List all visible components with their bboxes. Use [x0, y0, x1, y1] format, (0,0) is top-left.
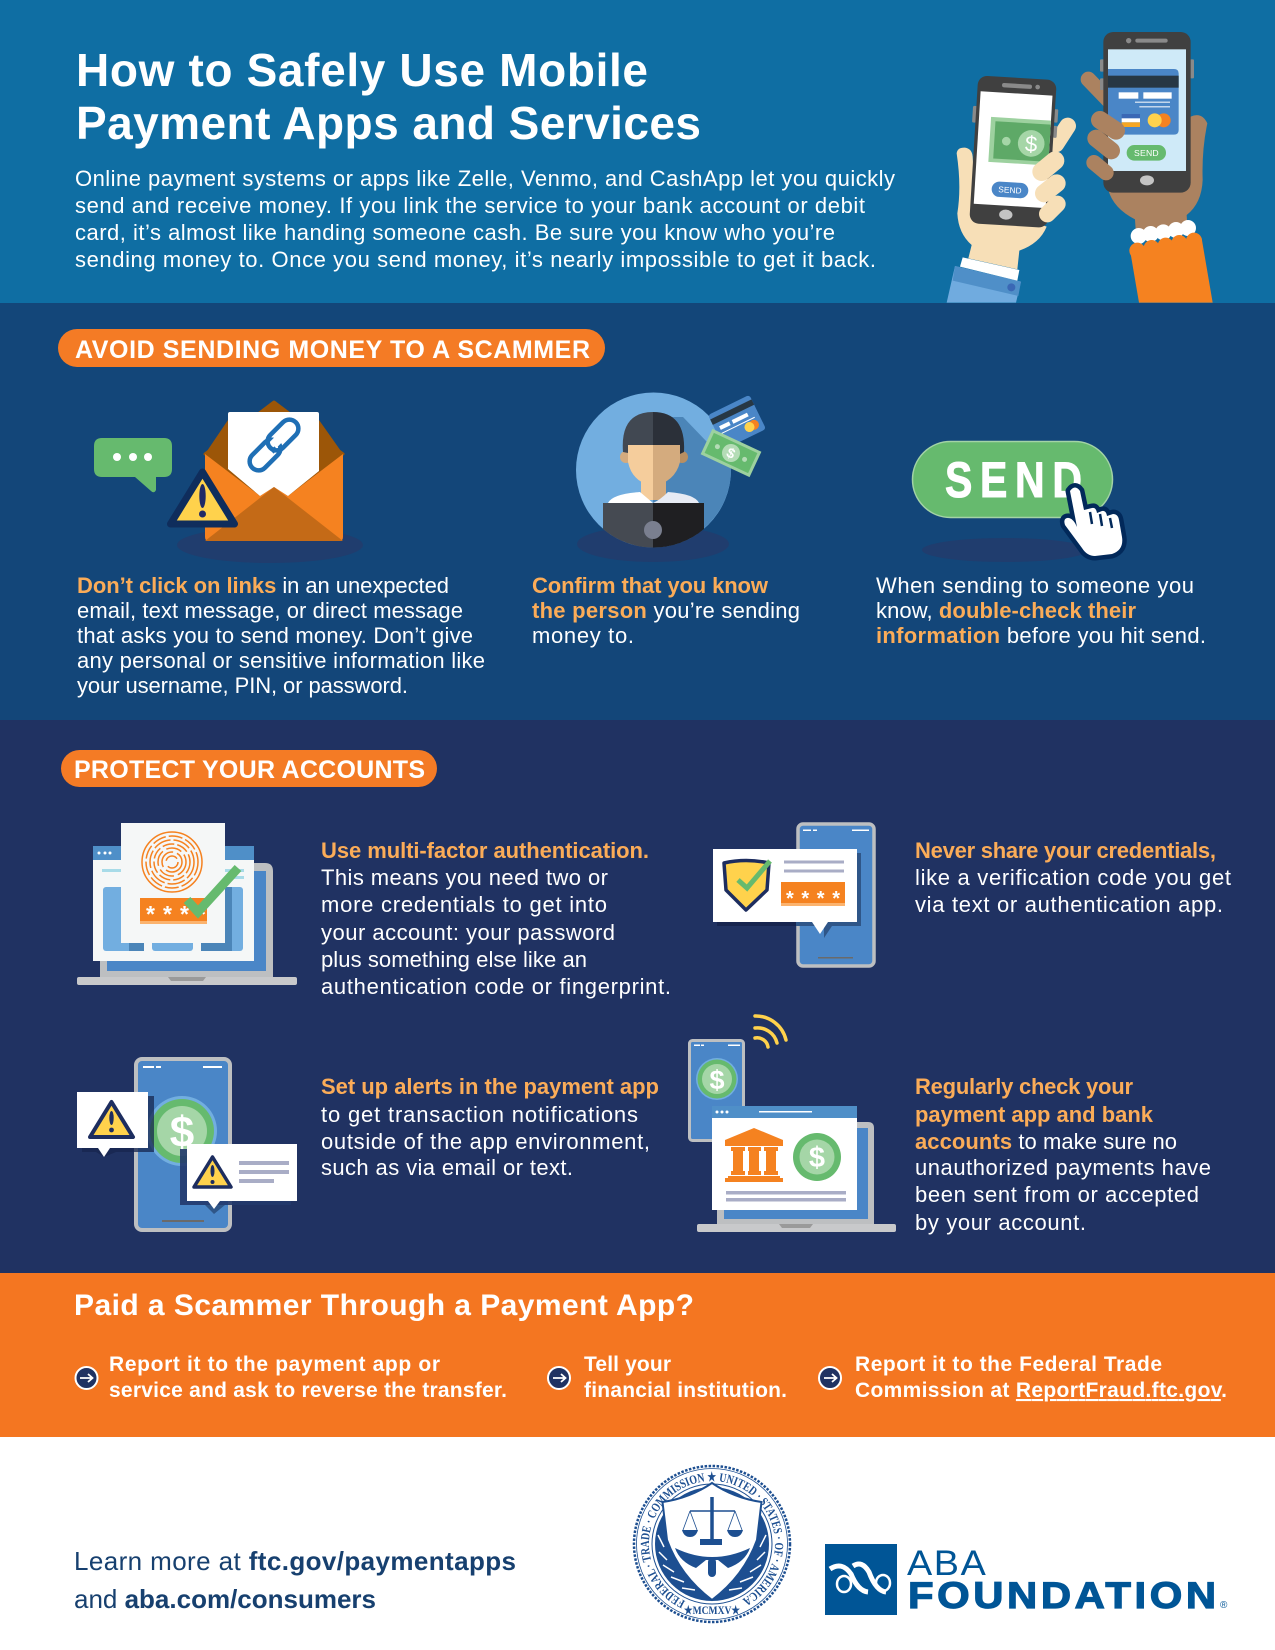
text: double-check their information [876, 573, 1206, 648]
logo: ABA Foundation [825, 1543, 1228, 1616]
icon: chain link [246, 416, 302, 474]
icon: shield [724, 860, 769, 910]
title: Payment Apps and Services [76, 97, 701, 149]
panel: footer [74, 1464, 1228, 1624]
text: don't click on links: email, text message, or direct message [77, 598, 463, 623]
text: learn more: and aba.com/consumers [74, 1584, 376, 1614]
text: double-check their information: When sending to someone you [876, 573, 1194, 598]
action: report to the FTC: Report it to the Federal Trade [855, 1353, 1162, 1376]
action: tell your financial institution [548, 1353, 787, 1402]
icon: phone, laptop, bank and coin [690, 1016, 896, 1232]
icon: dollar bill: $ [724, 444, 738, 462]
text: set up alerts [321, 1074, 659, 1180]
text: regularly check your accounts [915, 1074, 1211, 1235]
text: multi-factor authentication: This means you need two or [321, 865, 608, 890]
text: multi-factor authentication: Use multi-factor authentication. [321, 838, 649, 863]
icon: person at laptop with card and cash [576, 392, 766, 562]
text: never share your credentials: Never share your credentials, [915, 838, 1216, 863]
text: learn more [74, 1546, 516, 1614]
icon: laptop with fingerprint and password [77, 823, 297, 985]
icon: send button with pointing hand [912, 442, 1122, 562]
icon: phone with shield and password card: **** [786, 888, 840, 910]
icon: left hand and phone: $ [1024, 131, 1038, 157]
action: tell your financial institution: Tell your [584, 1353, 671, 1376]
text: multi-factor authentication: authentication code or fingerprint. [321, 974, 671, 999]
text: never share your credentials: via text or authentication app. [915, 892, 1223, 917]
icon: hands holding phones [947, 32, 1213, 303]
panel: paid a scammer [0, 1273, 1275, 1437]
icon: left hand and phone [947, 75, 1068, 303]
intro text: Online payment systems or apps like Zelle, Venmo, and CashApp let you quickly [75, 166, 895, 191]
text: multi-factor authentication [321, 838, 671, 999]
text: never share your credentials [915, 838, 1231, 917]
text: confirm that you know the person: the person you’re sending [532, 598, 800, 623]
text: set up alerts: outside of the app environment, [321, 1129, 650, 1154]
text: double-check their information: know, double-check their [876, 598, 1136, 623]
icon: phone, laptop, bank and coin: $ [709, 1065, 725, 1095]
action: report to the FTC [819, 1353, 1227, 1402]
intro text: sending money to. Once you send money, it’s nearly impossible to get it back. [75, 247, 876, 272]
action: report to the FTC: Commission at ReportFraud.ftc.gov. [855, 1379, 1227, 1402]
text: set up alerts: to get transaction notifications [321, 1102, 638, 1127]
icon: right hand and phone [1088, 32, 1213, 303]
intro text: send and receive money. If you link the service to your bank account or debit [75, 193, 865, 218]
icon: dollar bill [701, 429, 761, 477]
text: regularly check your accounts: accounts to make sure no [915, 1129, 1177, 1154]
panel: avoid sending money to a scammer [0, 303, 1275, 720]
text: don't click on links [77, 573, 485, 698]
icon: phone with coin and warning alerts: $ [170, 1108, 194, 1157]
logo: FTC seal: FEDERAL · TRADE · COMMISSION ★ UNITED · STATES · OF · AMERICA [640, 1471, 784, 1608]
heading pill: avoid sending money: AVOID SENDING MONEY TO A SCAMMER [75, 336, 590, 364]
icon: laptop with fingerprint and password: **** [146, 901, 206, 927]
action: report to the payment app [76, 1353, 507, 1402]
text: don't click on links: Don’t click on links in an unexpected [77, 573, 449, 598]
icon: send button with pointing hand: SEND [945, 452, 1082, 508]
logo: ABA Foundation: FOUNDATION [908, 1575, 1216, 1616]
icon: warning triangle [170, 472, 234, 524]
panel: header [0, 0, 1275, 303]
icon: scales of justice [682, 1497, 743, 1542]
text: regularly check your accounts: been sent from or accepted [915, 1182, 1199, 1207]
icon: speech bubble [94, 438, 172, 492]
title: How to Safely Use Mobile [76, 44, 648, 96]
text: confirm that you know the person: Confirm that you know [532, 573, 769, 598]
text: regularly check your accounts: Regularly check your [915, 1074, 1133, 1099]
icon: pointer hand [1064, 488, 1122, 556]
icon: laurel leaves [658, 1535, 766, 1590]
panel: protect your accounts [0, 720, 1275, 1273]
text: don't click on links: your username, PIN, or password. [77, 673, 408, 698]
text: multi-factor authentication: more credentials to get into [321, 892, 607, 917]
action: report to the payment app: Report it to the payment app or [109, 1353, 440, 1376]
text: never share your credentials: like a verification code you get [915, 865, 1231, 890]
text: learn more: Learn more at ftc.gov/paymentapps [74, 1546, 516, 1576]
icon: phone with shield and password card [713, 824, 874, 966]
icon: phone, laptop, bank and coin: $ [809, 1142, 825, 1174]
icon: warning triangle left [90, 1102, 133, 1137]
icon: shield [662, 1483, 762, 1600]
icon: left hand and phone: SEND [998, 184, 1022, 196]
icon: credit card [708, 395, 766, 449]
logo: ABA Foundation: ABA [907, 1543, 987, 1583]
title [76, 44, 701, 149]
intro text [75, 166, 895, 272]
icon: fingerprint [142, 832, 202, 892]
heading pill: protect your accounts: PROTECT YOUR ACCOUNTS [74, 756, 425, 784]
text: set up alerts: Set up alerts in the payment app [321, 1074, 659, 1099]
text: double-check their information: information before you hit send. [876, 623, 1206, 648]
text: multi-factor authentication: your account: your password [321, 920, 615, 945]
text: confirm that you know the person [532, 573, 800, 648]
icon: arrow circle [76, 1367, 98, 1389]
icon: warning triangle right [194, 1157, 231, 1187]
icon: ABA swirl [830, 1564, 890, 1592]
icon: bank building [725, 1128, 783, 1182]
intro text: card, it’s almost like handing someone cash. Be sure you know who you’re [75, 220, 835, 245]
text: set up alerts: such as via email or text. [321, 1155, 573, 1180]
text: regularly check your accounts: payment app and bank [915, 1102, 1154, 1127]
icon: arrow circle [548, 1367, 570, 1389]
text: regularly check your accounts: by your account. [915, 1210, 1086, 1235]
heading pill: avoid sending money [58, 329, 605, 367]
heading: paid a scammer: Paid a Scammer Through a Payment App? [74, 1289, 694, 1322]
icon: arrow circle [819, 1367, 841, 1389]
text: multi-factor authentication: plus something else like an [321, 947, 587, 972]
logo: ABA Foundation: ® [1220, 1600, 1228, 1611]
text: don't click on links: that asks you to send money. Don’t give [77, 623, 473, 648]
icon: eagle wings [675, 1548, 750, 1568]
icon: phone with coin and warning alerts [77, 1059, 297, 1230]
action: report to the payment app: service and ask to reverse the transfer. [109, 1379, 507, 1402]
text: regularly check your accounts: unauthorized payments have [915, 1155, 1211, 1180]
icon: right hand and phone: SEND [1134, 148, 1159, 158]
icon: envelope with link and warning [94, 402, 363, 563]
text: confirm that you know the person: money to. [532, 623, 634, 648]
text: don't click on links: any personal or sensitive information like [77, 648, 485, 673]
logo: FTC seal: ★MCMXV★ [684, 1604, 741, 1617]
action: tell your financial institution: financial institution. [584, 1379, 787, 1402]
icon: signal waves [755, 1016, 786, 1047]
